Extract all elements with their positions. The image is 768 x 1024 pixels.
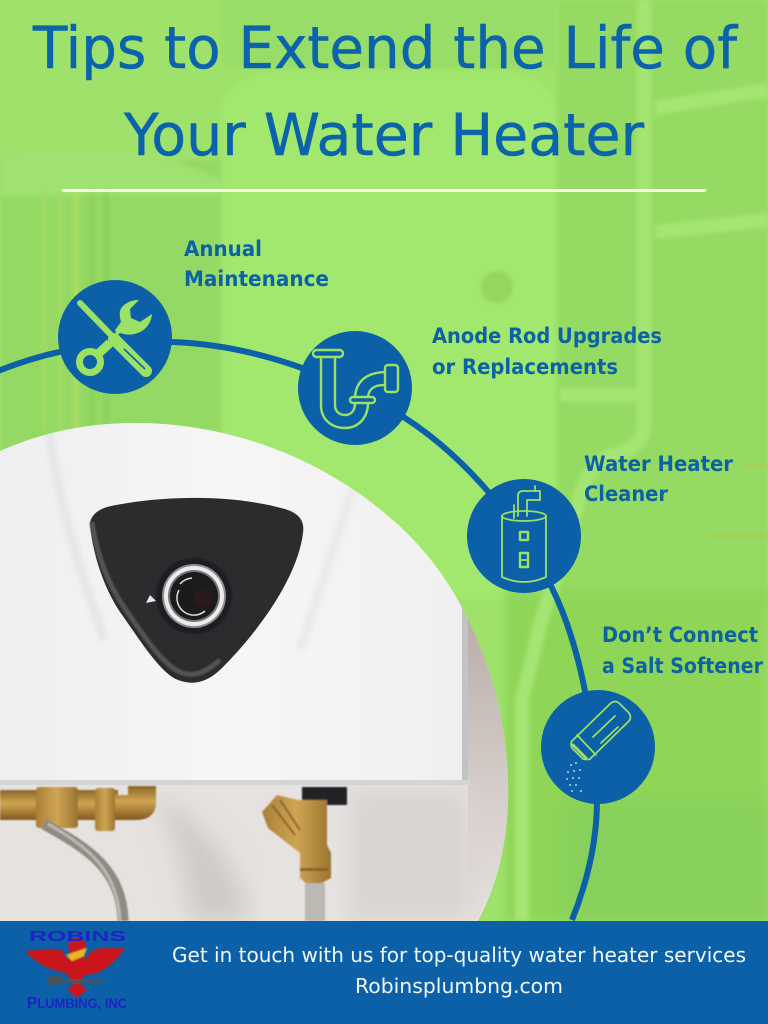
label: water heater cleaner: Cleaner [584,482,669,506]
divider line [62,189,706,192]
title: Your Water Heater [123,101,644,169]
step 4: no salt softener [541,623,764,804]
website: Robinsplumbng.com [355,974,563,998]
timeline arc [0,342,597,920]
logo text: Plumbing, Inc: PLUMBING, INC [27,995,127,1012]
brass valve right [262,787,347,921]
footer band [0,921,768,1024]
title [32,14,739,169]
icon: salt shaker [571,702,630,760]
title: Tips to Extend the Life of [32,14,739,82]
icon: wrench and screwdriver [80,300,152,372]
bird mascot with pipe wrench [25,938,125,998]
step 2: anode rod [298,324,662,445]
step 1: annual maintenance [58,237,329,394]
logo: Robins Plumbing [25,928,127,1012]
label: anode rod upgrades or replacements: Anode Rod Upgrades [432,324,662,348]
grey flexible pipe [44,824,123,921]
warning triangle [146,595,156,603]
photo: wall-mounted tankless water heater [0,415,520,921]
logo text: Robins: ROBINS [29,928,126,945]
wall behind heater [0,420,520,921]
temperature dial [156,558,232,634]
control panel [90,498,303,683]
label: anode rod upgrades or replacements: or Replacements [432,355,618,379]
label: annual maintenance: Annual [184,237,262,261]
icon: falling salt [566,762,582,792]
label: annual maintenance: Maintenance [184,267,329,291]
brass fittings left [0,786,156,831]
icon: storage water heater [502,486,546,582]
label: water heater cleaner: Water Heater [584,452,734,476]
step 3: water heater cleaner [467,452,734,593]
heater body [0,415,468,784]
icon: P-trap pipe [313,350,398,428]
label: don't connect a salt softener: Don’t Connect [602,623,758,647]
call to action: Get in touch with us for top-quality water heater services [172,943,746,967]
